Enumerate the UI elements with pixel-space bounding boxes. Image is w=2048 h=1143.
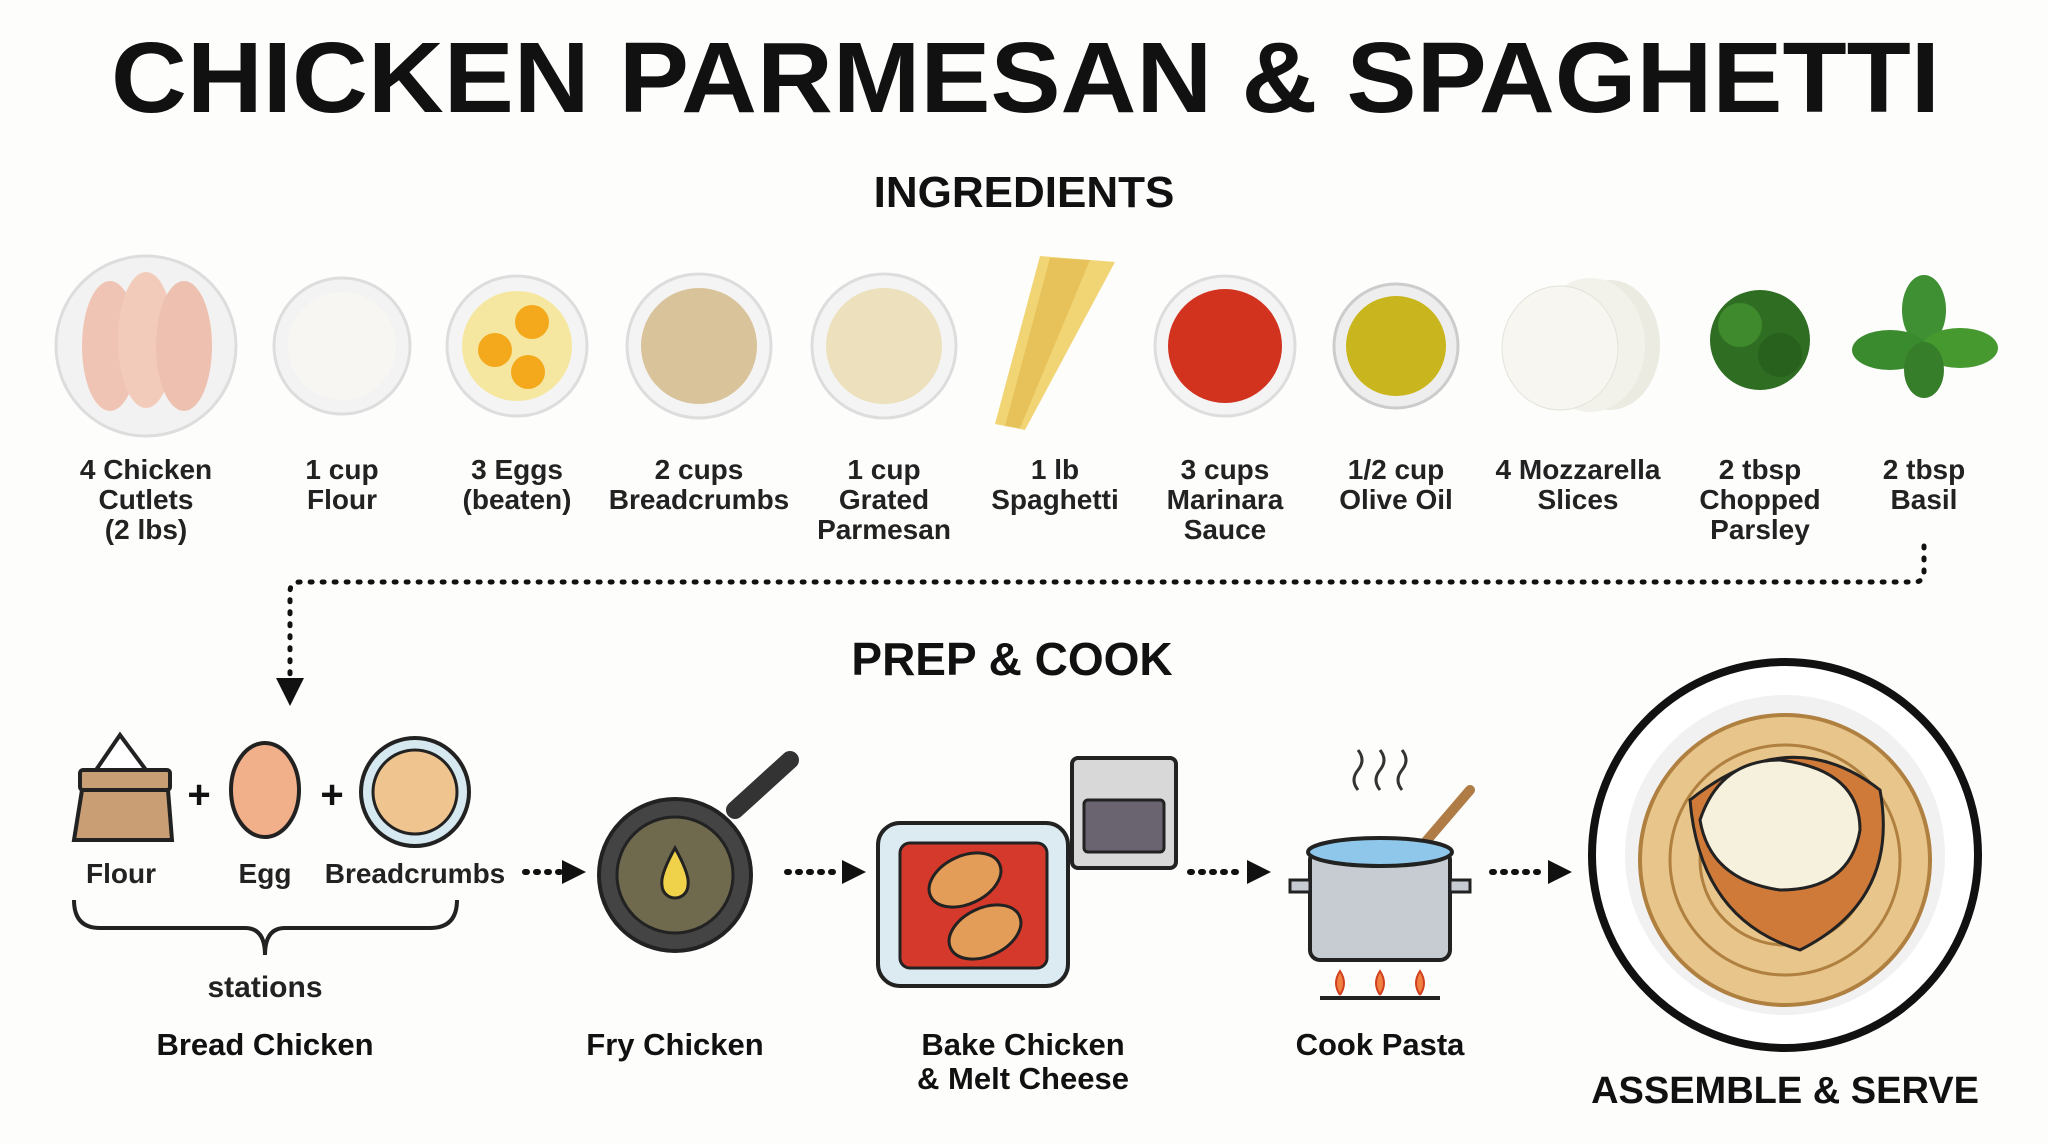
ingredient labels xyxy=(80,454,1965,545)
text: stations: stations xyxy=(207,971,323,1004)
ingredient labels: 2 tbsp xyxy=(1719,454,1801,485)
ingredient: flour xyxy=(274,278,410,414)
ingredient: olive oil xyxy=(1334,284,1458,408)
ingredient labels: Breadcrumbs xyxy=(609,484,789,515)
ingredient labels: Parmesan xyxy=(817,514,951,545)
ingredient labels: Grated xyxy=(839,484,929,515)
ingredient: chicken xyxy=(56,256,236,436)
ingredient labels: 2 cups xyxy=(655,454,743,485)
label: cook pasta: Cook Pasta xyxy=(1296,1027,1465,1062)
icon: baking dish xyxy=(878,823,1068,986)
ingredient labels: 2 tbsp xyxy=(1883,454,1965,485)
ingredient labels: Spaghetti xyxy=(991,484,1119,515)
plus: + xyxy=(187,773,211,817)
label: assemble & serve: ASSEMBLE & SERVE xyxy=(1591,1070,1979,1112)
station labels: Egg xyxy=(239,858,291,889)
label: fry chicken: Fry Chicken xyxy=(586,1027,764,1062)
text: & Melt Cheese xyxy=(917,1061,1129,1096)
ingredient labels: Flour xyxy=(307,484,377,515)
ingredient: parmesan xyxy=(812,274,956,418)
ingredient labels: Parsley xyxy=(1710,514,1810,545)
ingredient labels: Chopped xyxy=(1699,484,1821,515)
arrow 1 xyxy=(525,860,586,884)
arrow 3 xyxy=(1190,860,1271,884)
icon: oven xyxy=(1072,758,1176,868)
brace xyxy=(74,900,457,955)
heading: ingredients: INGREDIENTS xyxy=(874,168,1174,217)
plus: + xyxy=(320,773,344,817)
icon: plated dish xyxy=(1592,662,1978,1048)
ingredient: parsley xyxy=(1710,290,1810,390)
ingredient labels: Basil xyxy=(1891,484,1957,515)
icon: breadcrumbs plate xyxy=(361,738,469,846)
ingredient labels: Olive Oil xyxy=(1339,484,1453,515)
ingredient labels: Cutlets xyxy=(99,484,193,515)
arrow 2 xyxy=(787,860,866,884)
label: bake chicken: Bake Chicken xyxy=(921,1027,1125,1062)
icon: egg xyxy=(231,743,299,837)
ingredient: basil xyxy=(1852,275,1998,398)
arrow 4 xyxy=(1492,860,1572,884)
ingredient labels: 1 cup xyxy=(847,454,921,485)
ingredient: eggs xyxy=(447,276,587,416)
icon: frying pan xyxy=(599,760,790,951)
ingredient labels: (2 lbs) xyxy=(105,514,187,545)
arrow: dotted connector xyxy=(276,546,1924,706)
label: bread chicken: Bread Chicken xyxy=(156,1027,374,1062)
station labels: Breadcrumbs xyxy=(325,858,505,889)
ingredient labels: Marinara xyxy=(1167,484,1284,515)
ingredient: breadcrumbs xyxy=(627,274,771,418)
station labels xyxy=(86,858,505,889)
ingredient labels: 1/2 cup xyxy=(1348,454,1444,485)
station labels: Flour xyxy=(86,858,156,889)
ingredient labels: 1 cup xyxy=(305,454,379,485)
ingredient labels: 1 lb xyxy=(1031,454,1079,485)
ingredient labels: 4 Mozzarella xyxy=(1496,454,1661,485)
ingredient: marinara xyxy=(1155,276,1295,416)
ingredient labels: Sauce xyxy=(1184,514,1266,545)
ingredients row xyxy=(56,256,1998,436)
ingredient: mozzarella xyxy=(1502,278,1660,412)
ingredient labels: 3 Eggs xyxy=(471,454,563,485)
icon: flour bag xyxy=(74,735,172,840)
heading: prep & cook: PREP & COOK xyxy=(851,633,1173,685)
icon: pot xyxy=(1290,750,1470,998)
title: CHICKEN PARMESAN & SPAGHETTI xyxy=(111,22,1940,134)
ingredient labels: 3 cups xyxy=(1181,454,1269,485)
ingredient labels: 4 Chicken xyxy=(80,454,212,485)
ingredient: spaghetti xyxy=(995,256,1115,430)
ingredient labels: (beaten) xyxy=(463,484,571,515)
ingredient labels: Slices xyxy=(1538,484,1618,515)
